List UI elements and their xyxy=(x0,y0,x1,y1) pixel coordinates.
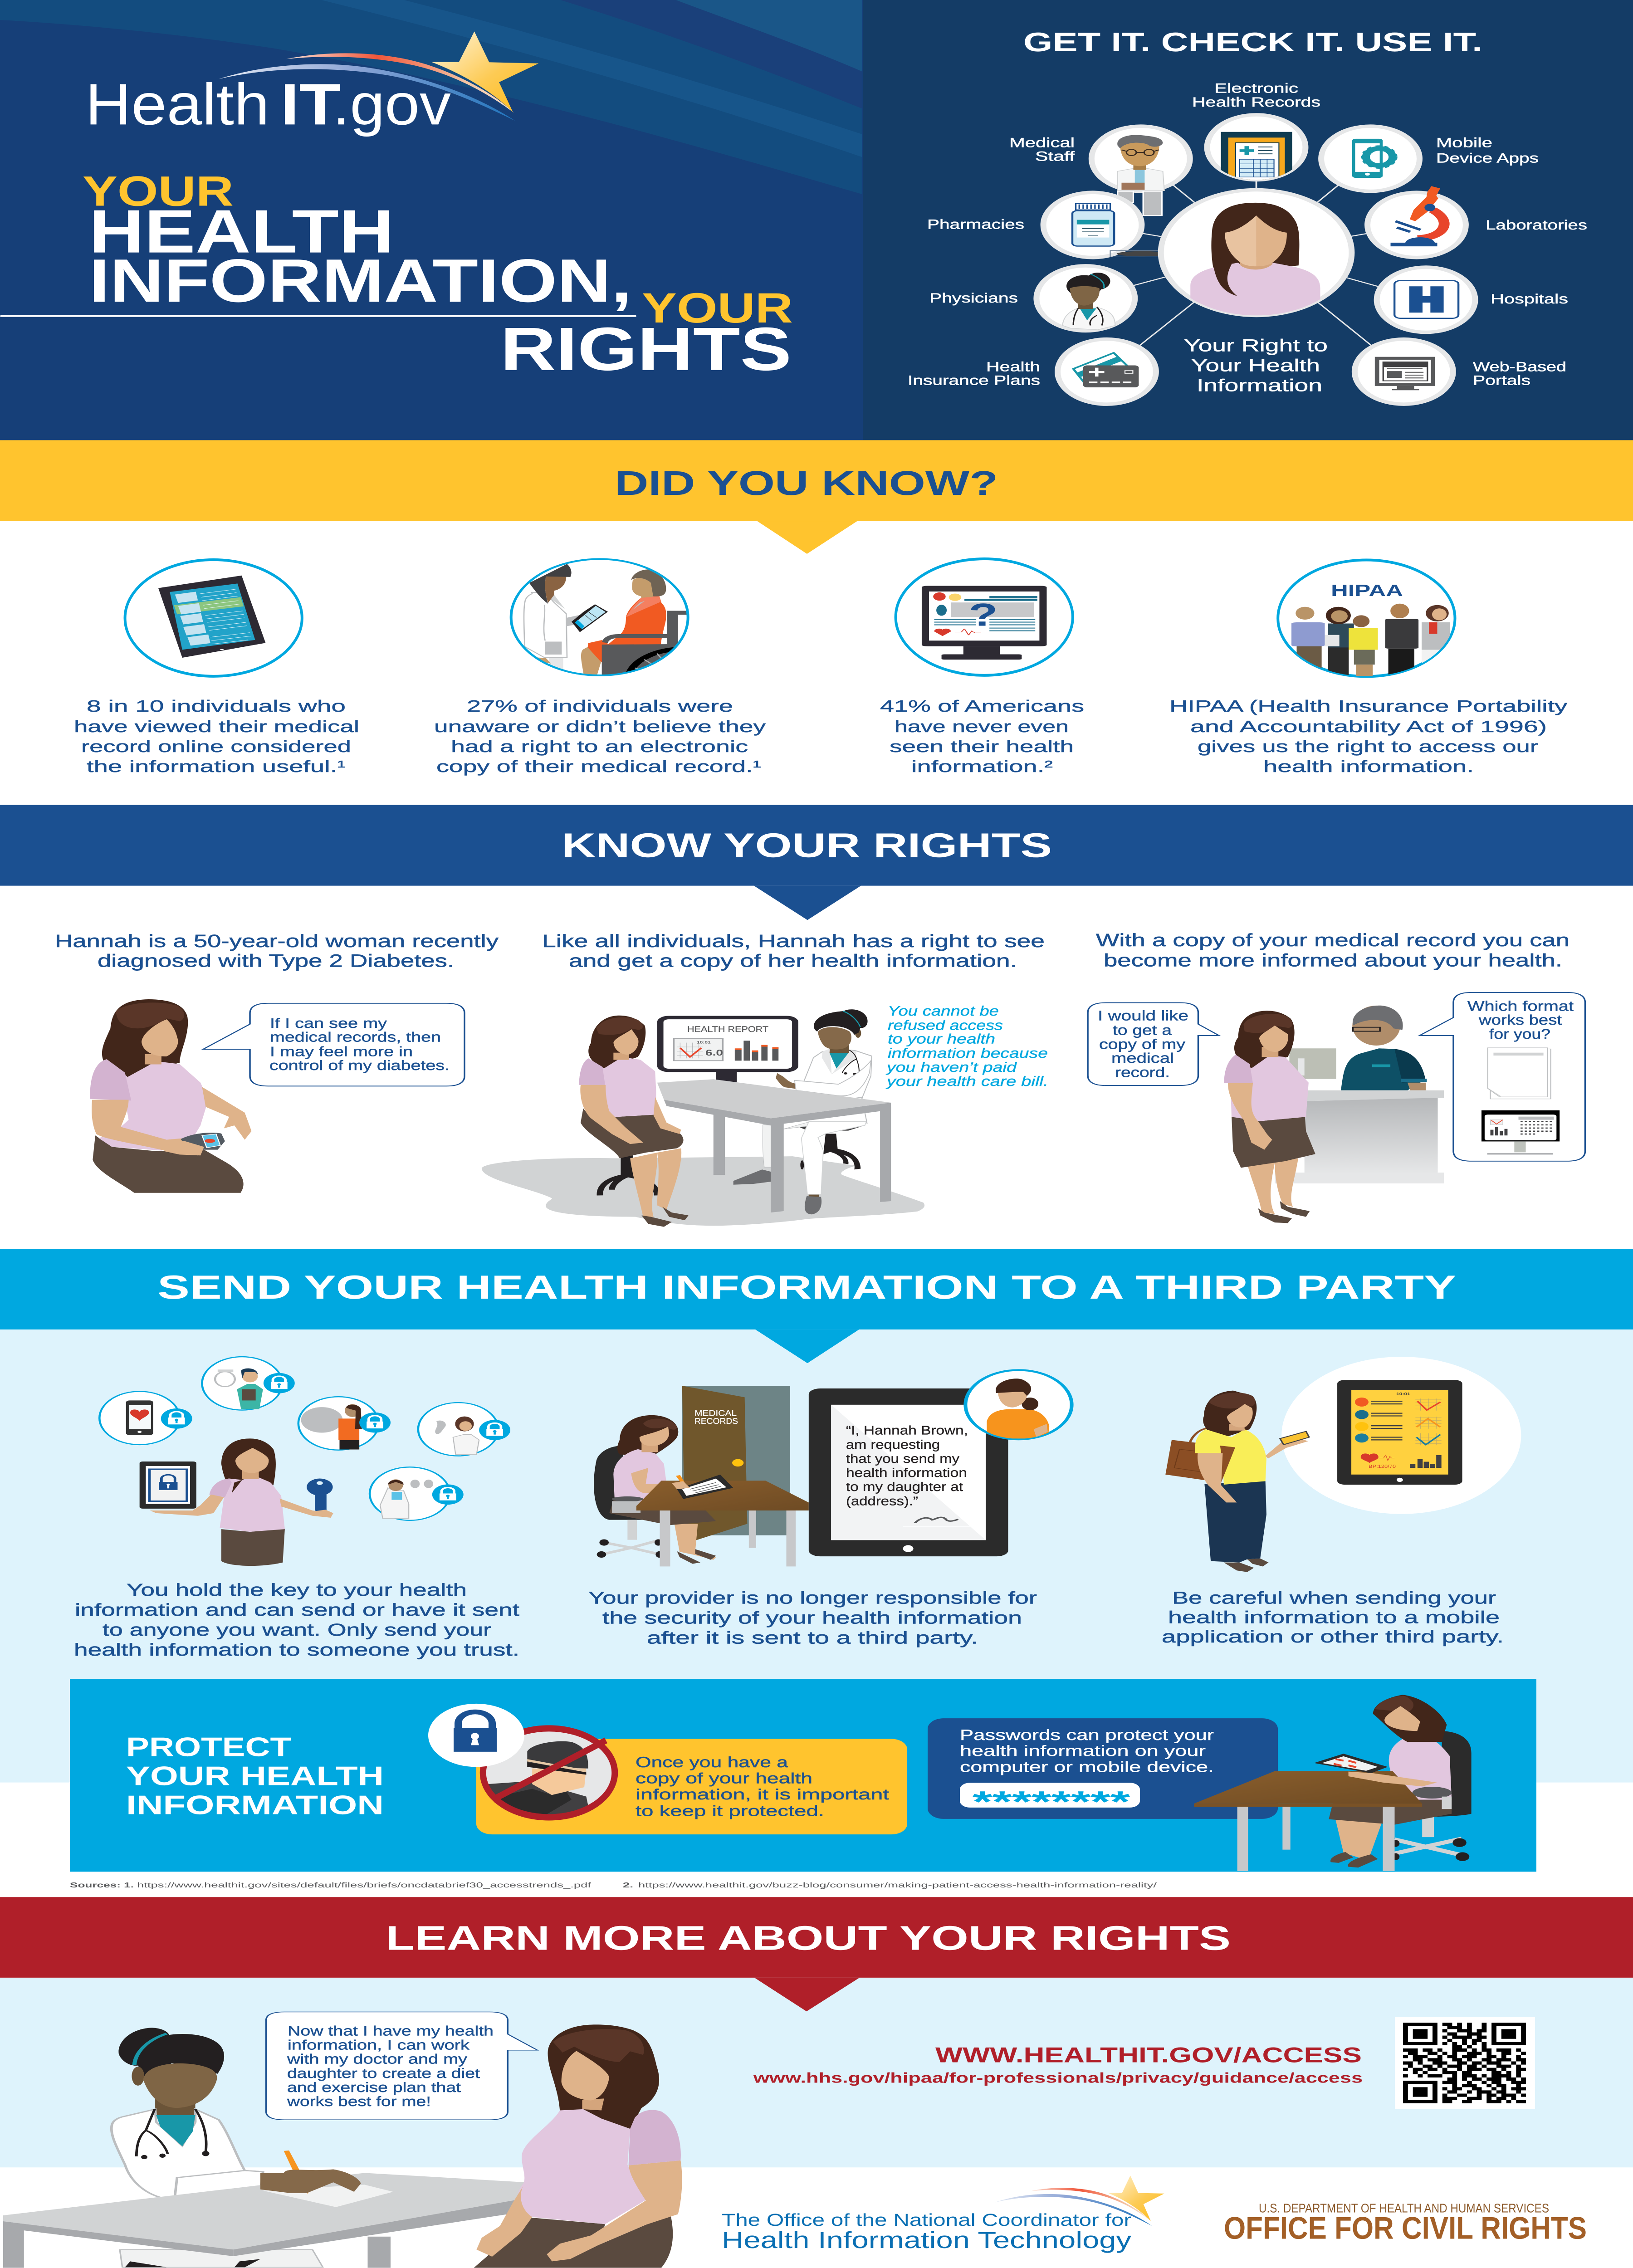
logo: HealthIT.gov xyxy=(85,31,538,137)
label: medical records xyxy=(694,1408,738,1426)
text: health report: 6.0 xyxy=(705,1048,723,1057)
text: stat 1 xyxy=(74,697,359,776)
text: request letter: that you send my xyxy=(846,1452,959,1466)
text: stat 3: 41% of Americans xyxy=(880,697,1084,715)
title: INFORMATION, xyxy=(89,246,632,315)
text: stat 1: have viewed their medical xyxy=(74,717,359,736)
illustration: woman sending data to mobile app xyxy=(1165,1357,1521,1572)
text: be careful xyxy=(1162,1588,1504,1647)
labels around hub: Laboratories xyxy=(1486,217,1587,232)
text: stat 2: unaware or didn’t believe they xyxy=(434,717,766,736)
panel: did you know xyxy=(0,440,1633,776)
speech bubble: control of my diabetes: control of my diabetes. xyxy=(269,1058,450,1073)
callout: passwords xyxy=(928,1718,1278,1819)
text: health report: HEALTH REPORT xyxy=(687,1025,768,1034)
links: www.hhs.gov/hipaa/for-professionals/privacy/guidance/access xyxy=(753,2070,1363,2086)
title xyxy=(0,167,793,383)
tablet small labels: BP:120/70 xyxy=(1369,1464,1396,1469)
speech bubble: I would like a copy xyxy=(1088,1003,1219,1085)
hub diagram xyxy=(1037,115,1475,404)
text: you hold the key: health information to someone you trust. xyxy=(74,1640,519,1660)
text: provider no longer responsible: the security of your health information xyxy=(602,1608,1022,1628)
text: stat 3 xyxy=(880,697,1084,776)
illustration: doctor at table with Hannah xyxy=(3,2024,682,2268)
callout: passwords: Passwords can protect your xyxy=(960,1727,1214,1743)
speech bubble: now that I have my health information: Now that I have my health xyxy=(288,2023,494,2038)
text: sources: 2. xyxy=(623,1881,633,1889)
banner: did you know xyxy=(0,440,1633,554)
logo: Office of the National Coordinator: Health Information Technology xyxy=(722,2227,1131,2253)
labels around hub: Physicians xyxy=(929,290,1018,306)
bubble: heart and teen xyxy=(298,1397,379,1450)
logo: HealthIT.gov: .gov xyxy=(332,72,451,137)
text: you hold the key xyxy=(74,1580,519,1660)
panel: header right, get it check it use it xyxy=(863,0,1633,440)
label: medical records: MEDICAL xyxy=(694,1408,737,1418)
text: sources: https://www.healthit.gov/buzz-blog/consumer/making-patient-access-health-information-reality/ xyxy=(638,1881,1157,1889)
text: intro column 2 xyxy=(542,931,1045,971)
speech bubble: now that I have my health information: information, I can work xyxy=(288,2037,470,2053)
icon: monitor with question mark: ? xyxy=(968,597,998,633)
text: intro column 3: With a copy of your medical record you can xyxy=(1096,930,1569,950)
tablet small labels xyxy=(1369,1392,1410,1469)
icon: mobile device apps xyxy=(1321,126,1419,191)
illustration: protected recipients and Hannah with key xyxy=(99,1357,510,1566)
callout: cannot be refused access: refused access xyxy=(888,1017,1003,1033)
text: be careful: health information to a mobile xyxy=(1168,1608,1500,1627)
banner: did you know: DID YOU KNOW? xyxy=(615,464,998,502)
text: stat 1: record online considered xyxy=(81,737,351,756)
stray shadow artifact xyxy=(1110,251,1174,257)
banner: send your health information xyxy=(0,1249,1633,1363)
text: stat 4: gives us the right to access our xyxy=(1198,737,1538,756)
labels around hub: Medical xyxy=(1009,135,1075,150)
text: stat 3: seen their health xyxy=(890,737,1074,756)
title: YOUR xyxy=(642,284,793,332)
text: intro column 1: Hannah is a 50-year-old woman recently xyxy=(55,931,499,951)
text: provider no longer responsible: after it is sent to a third party. xyxy=(647,1628,978,1647)
bubble: foot and doctor xyxy=(418,1403,499,1456)
labels around hub: Health xyxy=(986,359,1040,374)
illustration: tablet with request letter xyxy=(809,1370,1072,1556)
text: provider no longer responsible xyxy=(588,1588,1037,1647)
label: medical records: RECORDS xyxy=(694,1416,738,1426)
password field: ******** xyxy=(973,1785,1130,1818)
logo: Office of the National Coordinator: The Office of the National Coordinator for xyxy=(722,2210,1131,2230)
banner: learn more: LEARN MORE ABOUT YOUR RIGHTS xyxy=(386,1919,1231,1957)
labels around hub: Hospitals xyxy=(1491,291,1568,307)
speech bubble: I would like a copy: record. xyxy=(1115,1064,1170,1080)
callout: keep it protected: information, it is important xyxy=(636,1786,889,1803)
panel: know your rights xyxy=(0,805,1633,1227)
labels around hub: Electronic xyxy=(1214,81,1298,96)
text: stat 4: and Accountability Act of 1996) xyxy=(1190,717,1547,736)
speech bubble: control of my diabetes xyxy=(203,1003,464,1086)
illustration: Hannah with glucose meter xyxy=(90,999,251,1193)
panel: learn more xyxy=(0,1897,1633,2268)
figure: Hannah holding tablet and key xyxy=(140,1438,333,1566)
heading: protect: PROTECT xyxy=(126,1732,291,1762)
labels around hub: Device Apps xyxy=(1436,151,1539,166)
labels around hub: Portals xyxy=(1473,373,1530,388)
speech bubble: which format works best: works best xyxy=(1478,1012,1562,1028)
icon: monitor with question mark xyxy=(896,559,1073,675)
labels around hub: Pharmacies xyxy=(927,217,1024,232)
text: intro column 2: and get a copy of her health information. xyxy=(569,951,1017,971)
icon: tablet xyxy=(125,560,302,676)
text: stat 2 xyxy=(434,697,766,776)
text: stat 3: have never even xyxy=(895,717,1069,736)
logo: HealthIT.gov: Health xyxy=(85,72,269,137)
speech bubble: control of my diabetes: medical records, then xyxy=(270,1029,441,1045)
text: request letter: health information xyxy=(846,1466,967,1480)
speech bubble: I would like a copy: medical xyxy=(1111,1050,1174,1066)
text: stat 2: had a right to an electronic xyxy=(451,737,748,756)
callout: cannot be refused access xyxy=(885,1003,1048,1089)
icon: pharmacies xyxy=(1043,192,1142,258)
heading: get it check it use it: GET IT. CHECK IT. USE IT. xyxy=(1023,28,1482,57)
text: stat 4 xyxy=(1169,697,1567,776)
bubble: doctor and kidneys xyxy=(370,1467,450,1520)
links xyxy=(753,2043,1363,2086)
panel: header left xyxy=(0,0,863,440)
icon: electronic health records xyxy=(1207,115,1305,182)
text: stat 4: health information. xyxy=(1263,757,1474,776)
callout: cannot be refused access: your health care bill. xyxy=(885,1073,1048,1089)
logo: Office of the National Coordinator xyxy=(722,2175,1164,2253)
callout: passwords: health information on your xyxy=(960,1742,1206,1759)
text: stat 1: the information useful.¹ xyxy=(87,757,346,776)
callout: keep it protected xyxy=(476,1739,907,1834)
callout: passwords: computer or mobile device. xyxy=(960,1759,1214,1775)
icon: medical staff xyxy=(1091,126,1190,215)
text: sources xyxy=(70,1881,1157,1889)
banner: send your health information: SEND YOUR HEALTH INFORMATION TO A THIRD PARTY xyxy=(157,1269,1456,1306)
links: WWW.HEALTHIT.GOV/ACCESS xyxy=(935,2043,1362,2067)
title: YOUR xyxy=(83,167,234,215)
speech bubble: now that I have my health information: daughter to create a diet xyxy=(287,2065,480,2081)
icon: Hannah portrait hub xyxy=(1161,190,1352,315)
callout: cannot be refused access: information because xyxy=(888,1046,1048,1061)
labels around hub: Health Records xyxy=(1192,94,1320,109)
callout: keep it protected: copy of your health xyxy=(636,1770,812,1787)
speech bubble: now that I have my health information: and exercise plan that xyxy=(287,2079,461,2095)
icon: monitor with records xyxy=(1481,1110,1560,1154)
heading: protect: YOUR HEALTH xyxy=(126,1761,384,1791)
icon: HIPAA people xyxy=(1278,560,1455,676)
icon: physicians xyxy=(1037,266,1135,331)
icon: padlock xyxy=(428,1704,524,1767)
tablet small labels: 10:01 xyxy=(1396,1392,1410,1396)
text: stat 1: 8 in 10 individuals who xyxy=(87,697,346,715)
text: be careful: application or other third party. xyxy=(1162,1627,1504,1647)
icon: health insurance plans xyxy=(1058,339,1156,404)
hub caption: Information xyxy=(1197,376,1322,395)
text: intro column 3: become more informed about your health. xyxy=(1104,950,1562,970)
icon: doctor and patient in wheelchair xyxy=(511,559,688,675)
icon: paper document xyxy=(1488,1048,1551,1099)
icon: HIPAA people: HIPAA xyxy=(1331,581,1403,600)
speech bubble: I would like a copy: copy of my xyxy=(1099,1036,1185,1052)
speech bubble: now that I have my health information: works best for me! xyxy=(287,2093,431,2109)
text: request letter xyxy=(846,1423,968,1508)
panel: send to third party xyxy=(0,1249,1633,1783)
illustration: Hannah at reception counter xyxy=(1224,1006,1444,1223)
callout: cannot be refused access: to your health xyxy=(888,1031,995,1046)
text: request letter: (address).” xyxy=(846,1494,918,1508)
text: intro column 1 xyxy=(55,931,499,971)
text: request letter: to my daughter at xyxy=(846,1480,963,1494)
illustration: Hannah and doctor at desk xyxy=(482,1009,924,1227)
speech bubble: control of my diabetes: I may feel more in xyxy=(270,1044,413,1059)
icon: web-based portals xyxy=(1354,339,1453,404)
labels around hub: Mobile xyxy=(1436,135,1492,150)
hub caption xyxy=(1184,336,1328,395)
callout: keep it protected: to keep it protected. xyxy=(636,1803,824,1819)
text: request letter: “I, Hannah Brown, xyxy=(846,1423,968,1437)
heading: protect xyxy=(126,1732,384,1820)
icon: laboratories xyxy=(1368,186,1466,258)
labels around hub xyxy=(908,81,1587,388)
speech bubble: which format works best xyxy=(1419,992,1585,1161)
text: health report xyxy=(687,1025,768,1057)
speech bubble: which format works best: Which format xyxy=(1467,998,1574,1014)
labels around hub: Staff xyxy=(1035,149,1075,164)
text: sources: https://www.healthit.gov/sites/default/files/briefs/oncdatabrief30_accesstrends_.pdf xyxy=(137,1881,591,1889)
illustration: woman with tablet at table xyxy=(1194,1695,1472,1871)
portrait: daughter xyxy=(965,1370,1072,1439)
banner: know your rights: KNOW YOUR RIGHTS xyxy=(562,826,1052,865)
callout: cannot be refused access: You cannot be xyxy=(888,1003,999,1018)
text: stat 4: HIPAA (Health Insurance Portability xyxy=(1169,697,1567,715)
icon: thief in prohibited circle xyxy=(480,1727,618,1820)
bubble: nurse xyxy=(202,1357,282,1410)
panel: protect your health information xyxy=(70,1679,1536,1872)
callout: cannot be refused access: you haven’t paid xyxy=(885,1060,1017,1075)
QR code xyxy=(1395,2017,1535,2109)
text: intro column 1: diagnosed with Type 2 Diabetes. xyxy=(98,951,454,971)
logo: HealthIT.gov: IT xyxy=(280,72,341,137)
speech bubble: which format works best: for you? xyxy=(1489,1026,1550,1042)
text: you hold the key: to anyone you want. Only send your xyxy=(103,1620,491,1639)
text: intro column 2: Like all individuals, Hannah has a right to see xyxy=(542,931,1045,951)
text: stat 2: copy of their medical record.¹ xyxy=(436,757,761,776)
text: stat 2: 27% of individuals were xyxy=(467,697,733,715)
heading: protect: INFORMATION xyxy=(126,1790,384,1820)
speech bubble: now that I have my health information: with my doctor and my xyxy=(287,2051,467,2067)
text: provider no longer responsible: Your provider is no longer responsible for xyxy=(588,1588,1037,1608)
title: RIGHTS xyxy=(500,315,792,383)
text: you hold the key: information and can send or have it sent xyxy=(75,1600,519,1619)
hub caption: Your Health xyxy=(1191,356,1320,375)
illustration: medical records door and Hannah signing xyxy=(594,1386,809,1566)
text: request letter: am requesting xyxy=(846,1437,940,1452)
labels around hub: Insurance Plans xyxy=(908,373,1040,388)
hub caption: Your Right to xyxy=(1184,336,1328,355)
banner: learn more xyxy=(0,1897,1633,2011)
figure: doctor seated at desk xyxy=(733,1009,872,1214)
speech bubble: I would like a copy: I would like xyxy=(1098,1007,1188,1023)
text: be careful: Be careful when sending your xyxy=(1172,1588,1496,1608)
text: sources: Sources: 1. xyxy=(70,1881,134,1889)
icon: hospitals xyxy=(1377,267,1475,332)
text: health report: 10:01 xyxy=(697,1040,711,1045)
title: HEALTH xyxy=(89,197,394,266)
callout: keep it protected: Once you have a xyxy=(636,1754,788,1770)
text: stat 3: information.² xyxy=(911,757,1053,776)
speech bubble: I would like a copy: to get a xyxy=(1113,1022,1172,1038)
text: intro column 3 xyxy=(1096,930,1569,970)
text: you hold the key: You hold the key to your health xyxy=(127,1580,467,1599)
speech bubble: now that I have my health information xyxy=(266,2012,538,2120)
labels around hub: Web-Based xyxy=(1473,359,1566,374)
bubble: phone xyxy=(99,1391,192,1445)
speech bubble: control of my diabetes: If I can see my xyxy=(270,1015,387,1031)
banner: know your rights xyxy=(0,805,1633,920)
